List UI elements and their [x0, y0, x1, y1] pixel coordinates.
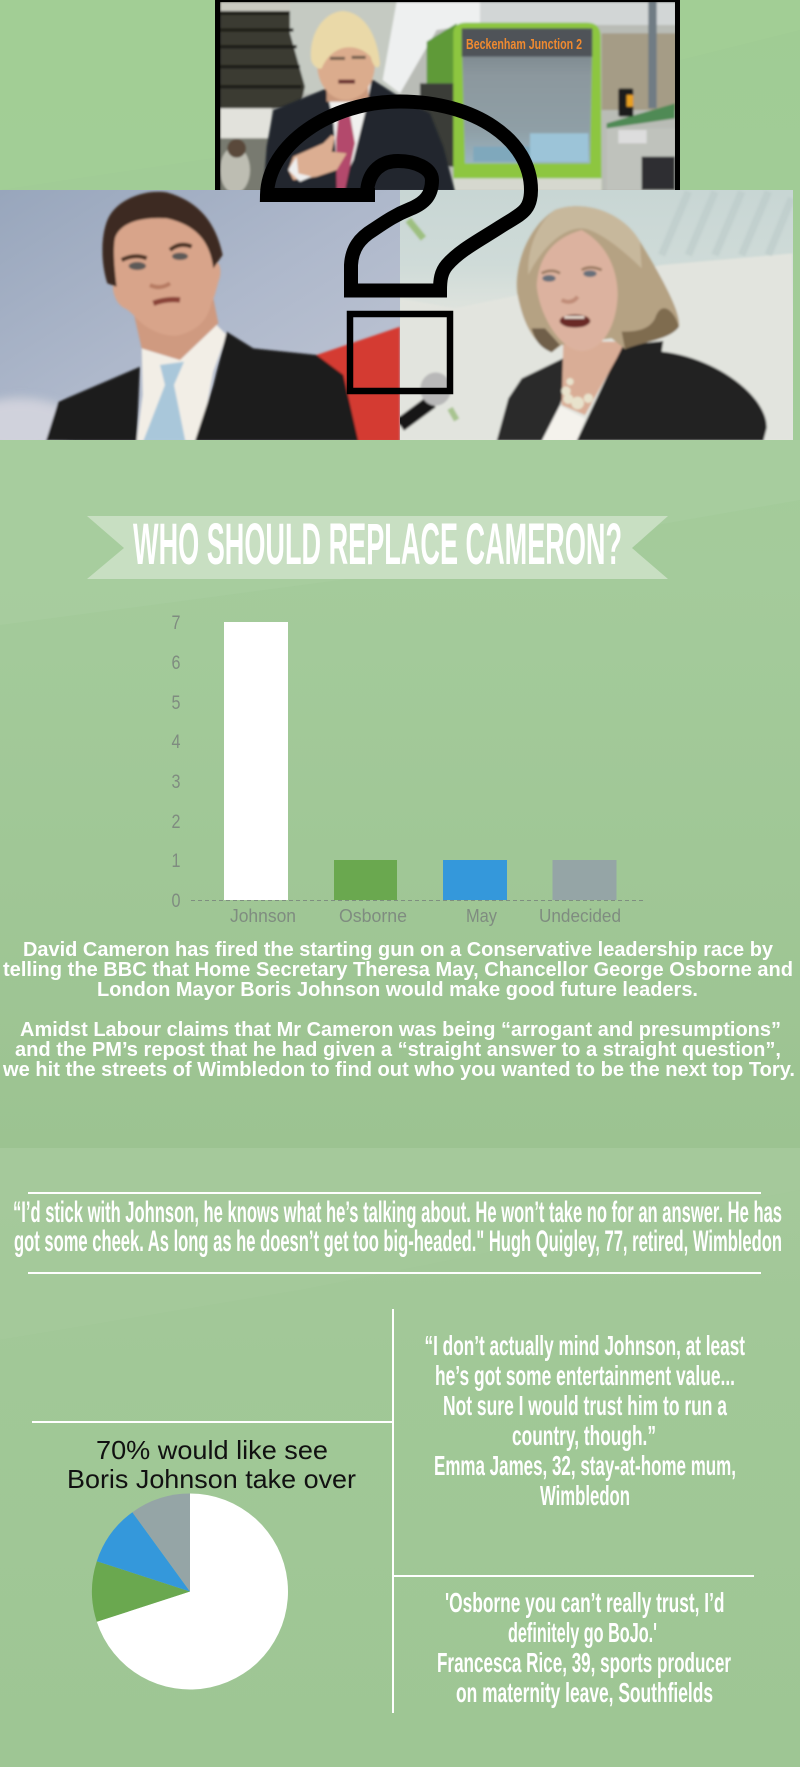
quote: Francesca Rice — [437, 1587, 731, 1708]
intro text: and the PM’s repost that he had given a “straight answer to a straight question”, — [15, 1039, 781, 1061]
x axis labels — [230, 906, 621, 926]
quote: Francesca Rice: definitely go BoJo.' — [508, 1617, 657, 1648]
pie chart — [92, 1494, 288, 1689]
y axis labels: 2 — [172, 812, 180, 833]
x axis labels: Undecided — [539, 906, 621, 926]
x axis labels: May — [466, 906, 497, 926]
photo: Theresa May — [400, 190, 793, 442]
intro text: telling the BBC that Home Secretary Theresa May, Chancellor George Osborne and — [3, 959, 793, 981]
bar: Undecided — [552, 860, 616, 900]
pie heading — [67, 1435, 356, 1494]
icon: question mark — [267, 102, 531, 391]
y axis labels: 3 — [172, 772, 180, 793]
x axis labels: Johnson — [230, 906, 296, 926]
tram destination sign: Beckenham Junction 2 — [466, 36, 582, 53]
intro text: Amidst Labour claims that Mr Cameron was being “arrogant and presumptions” — [20, 1019, 781, 1041]
intro text: London Mayor Boris Johnson would make good future leaders. — [97, 979, 698, 1001]
x axis labels: Osborne — [339, 906, 407, 926]
dividers — [32, 1309, 754, 1713]
title banner — [87, 512, 668, 579]
y axis labels: 1 — [172, 851, 180, 872]
quote: Hugh Quigley — [13, 1193, 782, 1273]
y axis labels: 7 — [172, 613, 180, 634]
bar: May — [443, 860, 507, 900]
y axis labels: 0 — [172, 891, 180, 912]
y axis labels: 6 — [172, 653, 180, 674]
intro text: David Cameron has fired the starting gun on a Conservative leadership race by — [23, 939, 774, 961]
photo: George Osborne — [0, 190, 400, 452]
quote: Emma James: Wimbledon — [540, 1480, 630, 1511]
y axis labels: 5 — [172, 693, 180, 714]
photo: Boris Johnson with tram — [215, 0, 680, 193]
y axis labels: 4 — [172, 732, 181, 753]
intro text — [2, 939, 795, 1081]
bar: Osborne — [334, 860, 397, 900]
quote: Emma James: country, though.” — [512, 1420, 656, 1451]
bar: Johnson — [224, 622, 288, 900]
pie heading: Boris Johnson take over — [67, 1464, 356, 1494]
quote: Emma James — [424, 1330, 745, 1511]
pie heading: 70% would like see — [96, 1435, 328, 1465]
y axis labels — [172, 613, 181, 912]
bar chart — [172, 613, 644, 926]
intro text: we hit the streets of Wimbledon to find out who you wanted to be the next top Tory. — [2, 1059, 795, 1081]
